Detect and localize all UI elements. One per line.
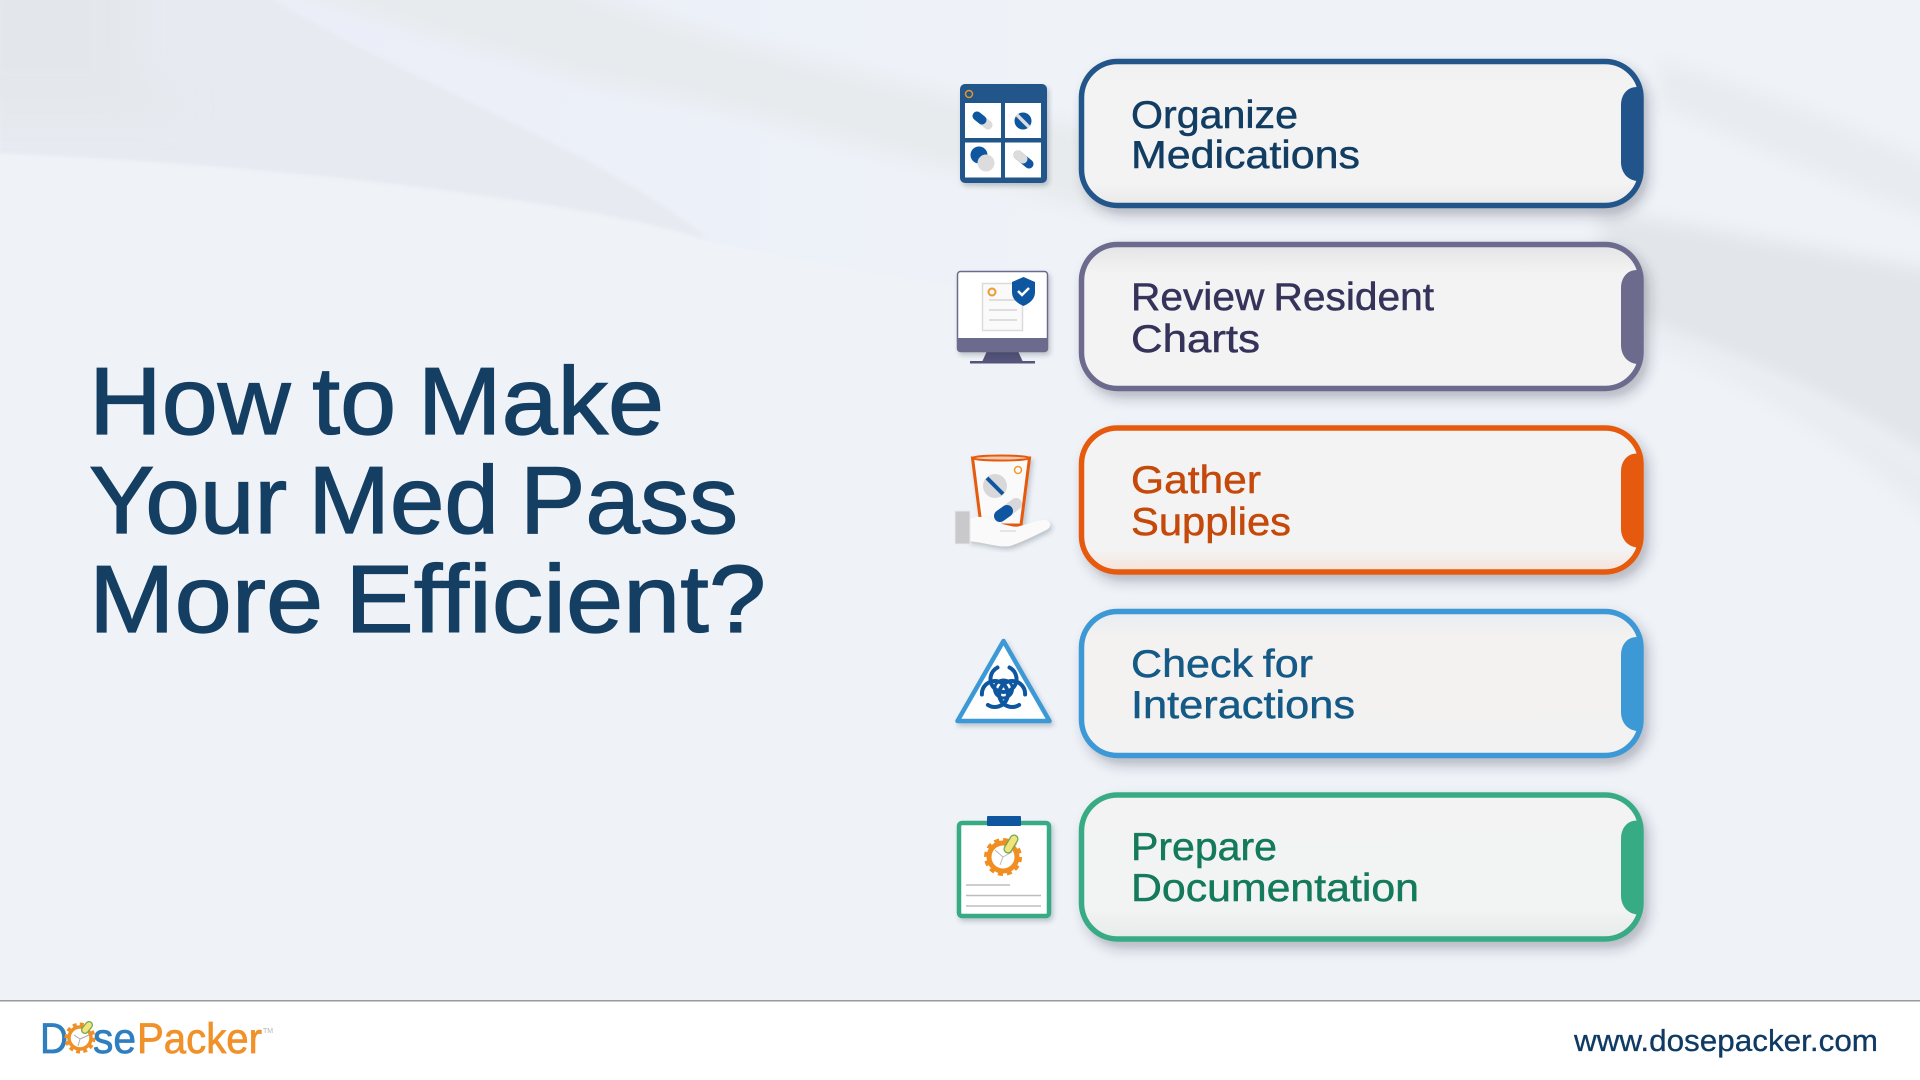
card: check for interactions: Interactions (1131, 684, 1355, 727)
footer (0, 1000, 1920, 1080)
card: gather supplies: Supplies (1131, 501, 1291, 544)
card: check for interactions (1082, 612, 1644, 756)
card: organize medications (1082, 62, 1644, 206)
card: gather supplies: Gather (1131, 459, 1261, 502)
card: check for interactions: Check for (1131, 643, 1313, 686)
logo: DosePacker: se (93, 1015, 136, 1063)
title: More Efficient? (89, 546, 766, 653)
card: review resident charts: Charts (1131, 318, 1260, 361)
title: How to Make (89, 348, 664, 455)
card: review resident charts: Review Resident (1131, 276, 1434, 319)
card: prepare documentation: Prepare (1131, 826, 1277, 869)
card: organize medications: Medications (1131, 134, 1360, 177)
card: gather supplies (1082, 428, 1644, 572)
card: prepare documentation: Documentation (1131, 867, 1419, 910)
website url: www.dosepacker.com (1573, 1023, 1878, 1058)
icon: pill cup on hand (955, 456, 1050, 546)
icon: pill organizer (960, 84, 1047, 183)
card: organize medications: Organize (1131, 94, 1298, 137)
card: prepare documentation (1082, 795, 1644, 939)
icon: monitor with chart and shield (957, 272, 1048, 364)
title (89, 348, 766, 653)
card: review resident charts (1082, 244, 1644, 388)
title: Your Med Pass (89, 447, 738, 554)
logo: DosePacker (40, 1015, 273, 1063)
logo: DosePacker: TM (263, 1028, 273, 1035)
logo: DosePacker: D (40, 1015, 68, 1063)
icon: clipboard with gear logo (959, 816, 1049, 916)
logo: DosePacker: Packer (137, 1015, 262, 1063)
icon: biohazard triangle (958, 641, 1050, 721)
